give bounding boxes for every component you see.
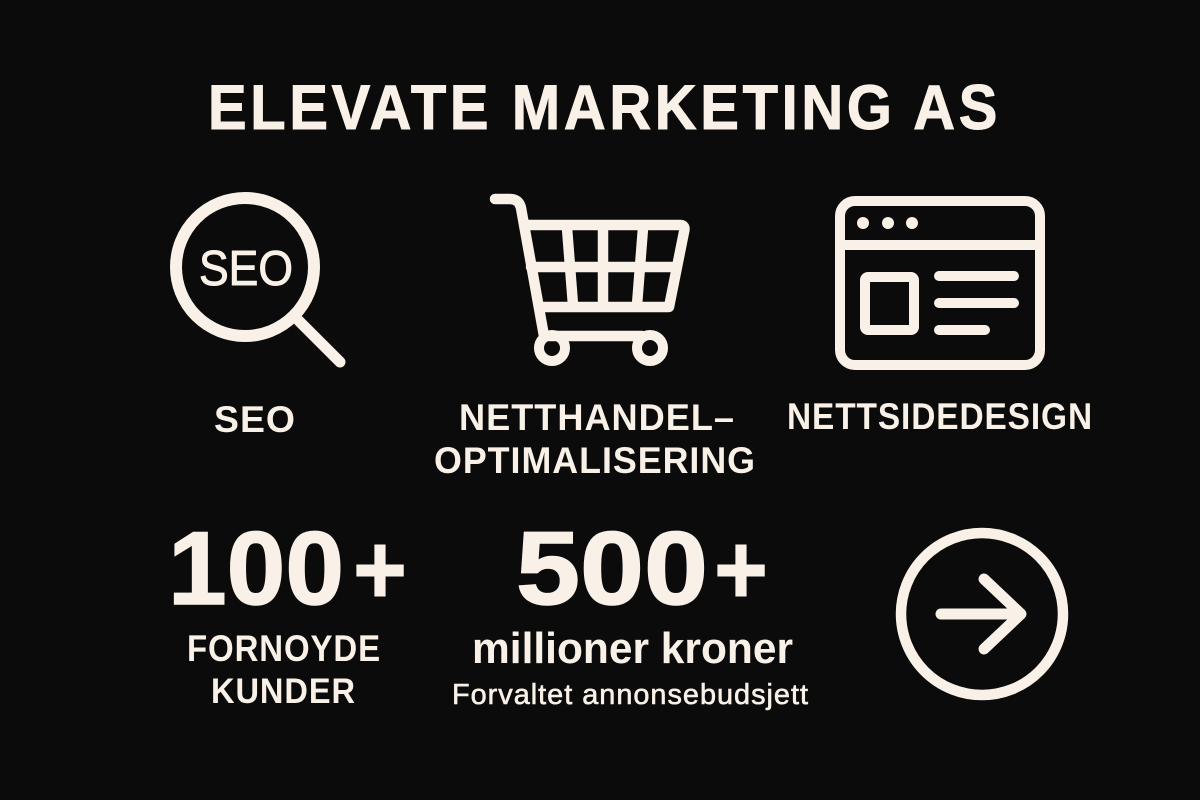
label: netthandel-optimalisering: NETTHANDEL– — [459, 397, 735, 438]
stat: 100+: 100 — [168, 511, 344, 627]
label: netthandel-optimalisering: OPTIMALISERING — [434, 440, 756, 481]
icon: shopping cart — [495, 199, 684, 361]
stat label: fornoyde kunder: KUNDER — [211, 672, 356, 711]
stat caption: forvaltet annonsebudsjett: Forvaltet annonsebudsjett — [452, 679, 809, 711]
icon: arrow in circle — [901, 533, 1063, 695]
title: ELEVATE MARKETING AS — [208, 73, 1001, 143]
stat: 500+: + — [714, 514, 768, 626]
icon: SEO magnifying glass — [176, 198, 340, 362]
stat: 500+: 500 — [516, 511, 708, 627]
stat label: millioner kroner: millioner kroner — [472, 624, 793, 673]
icon: SEO magnifying glass: SEO — [199, 242, 293, 296]
stat label: fornoyde kunder: FORNOYDE — [187, 628, 381, 669]
stat: 500+ — [516, 511, 768, 627]
label: nettsidedesign: NETTSIDEDESIGN — [787, 396, 1093, 437]
label: netthandel-optimalisering — [434, 397, 756, 481]
label: SEO: SEO — [214, 399, 296, 440]
stat: 100+: + — [353, 514, 407, 626]
icon: browser window — [840, 201, 1040, 365]
stat label: fornoyde kunder — [187, 628, 381, 711]
